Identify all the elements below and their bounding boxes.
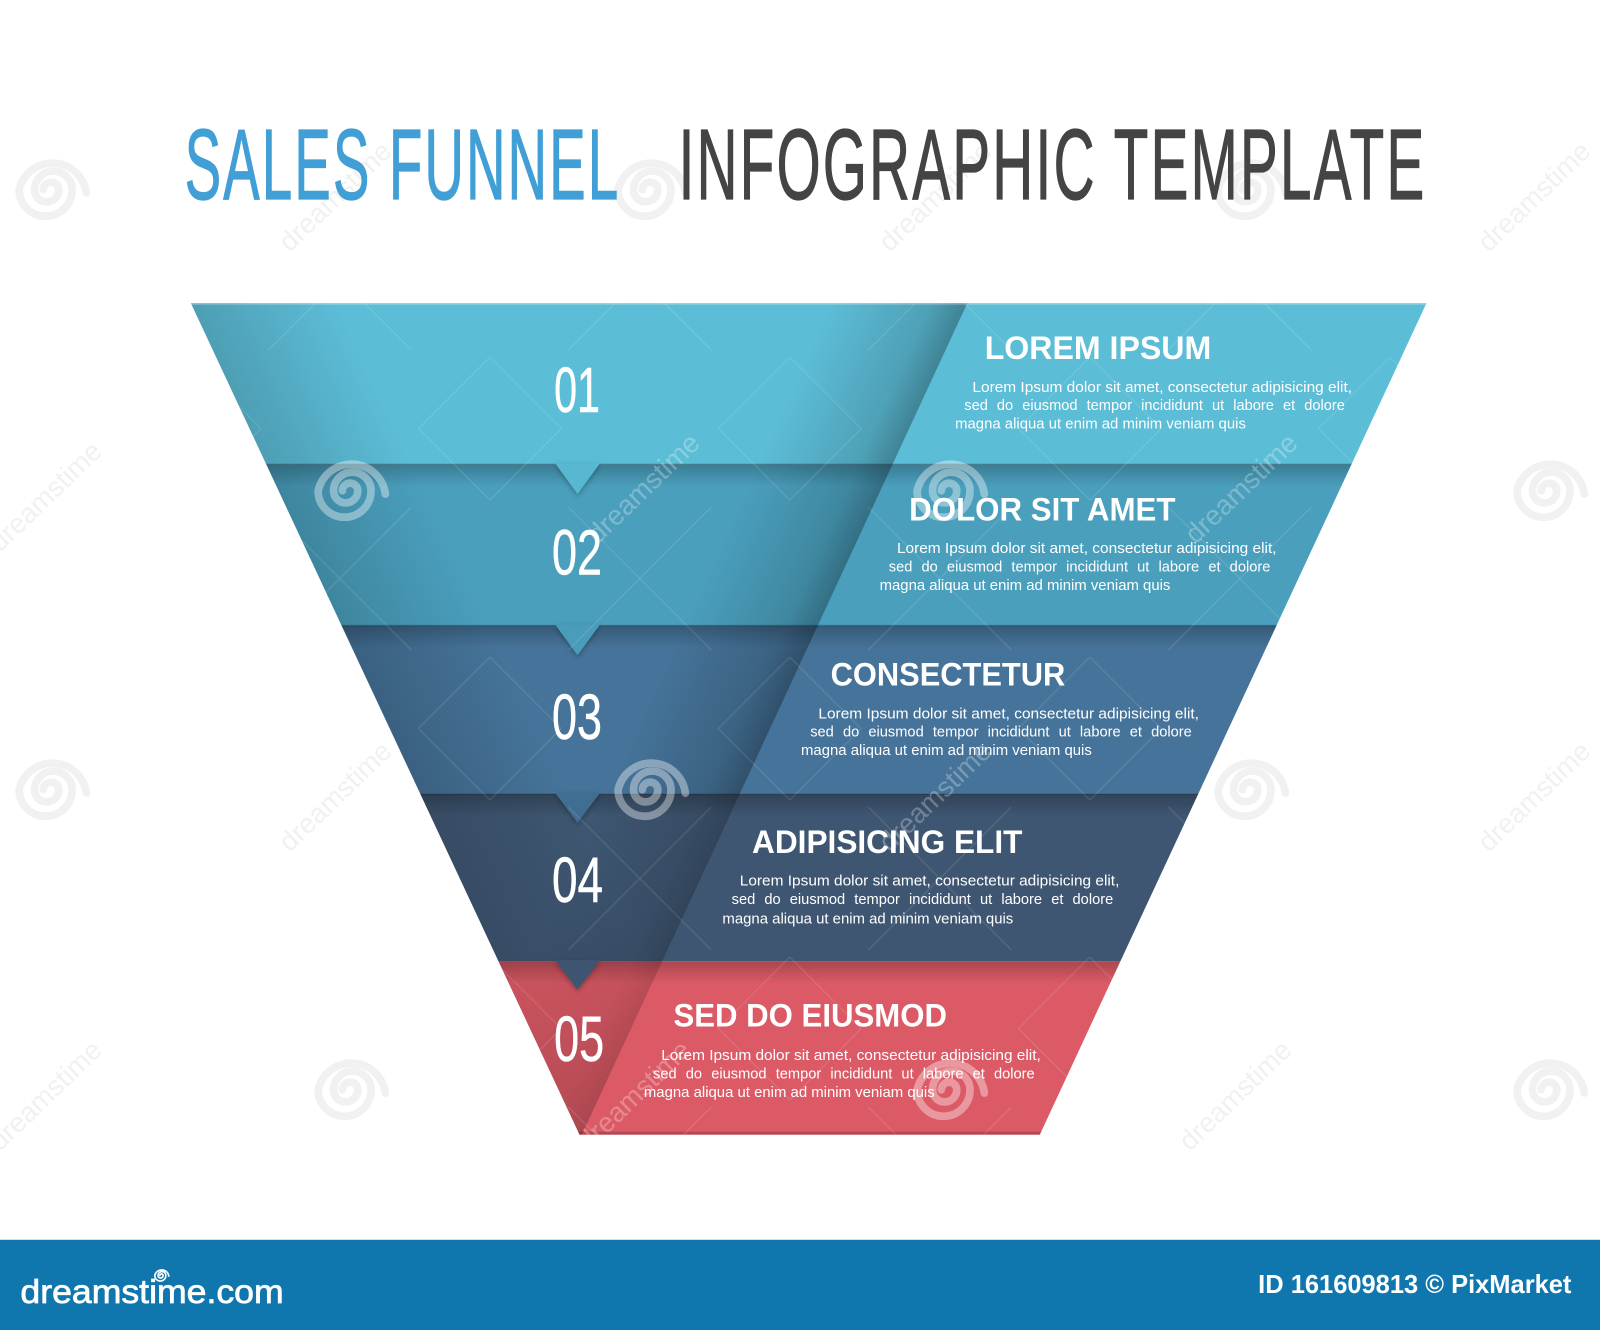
- text block: [722, 874, 1119, 927]
- text block: sed do eiusmod tempor incididunt ut labore et dolore: [810, 725, 1192, 741]
- footer bar: [0, 1240, 1600, 1330]
- step 05: [554, 997, 1041, 1101]
- band fills: [191, 303, 1427, 1135]
- background watermark: dreamstime: [1471, 135, 1596, 257]
- text block: sed do eiusmod tempor incididunt ut labore et dolore: [732, 892, 1113, 908]
- step 02: [552, 490, 1277, 594]
- text block: magna aliqua ut enim ad minim veniam quis: [955, 417, 1246, 433]
- funnel watermark: [239, 303, 1398, 1134]
- footer credit: ID 161609813 © PixMarket: [1258, 1271, 1572, 1299]
- heading: CONSECTETUR: [831, 656, 1065, 693]
- funnel watermark: dreamstime: [581, 427, 706, 549]
- number 03: 03: [552, 681, 602, 753]
- text block: sed do eiusmod tempor incididunt ut labore et dolore: [653, 1067, 1035, 1083]
- text block: sed do eiusmod tempor incididunt ut labore et dolore: [889, 559, 1270, 575]
- title: [185, 109, 1427, 221]
- number 05: 05: [554, 1003, 604, 1075]
- step 01: [554, 329, 1352, 433]
- number 04: 04: [552, 844, 603, 916]
- arrow: band 4: [555, 960, 600, 990]
- funnel watermark: dreamstime: [571, 1034, 696, 1156]
- text block: magna aliqua ut enim ad minim veniam quis: [880, 578, 1170, 594]
- text block: [644, 1048, 1041, 1101]
- text block: [880, 541, 1277, 594]
- step 03: [552, 656, 1199, 759]
- number 02: 02: [552, 516, 602, 588]
- text block: [801, 706, 1199, 759]
- background watermark: dreamstime: [1471, 735, 1596, 857]
- background watermark: [0, 135, 1596, 1156]
- arrow: band 2: [555, 624, 600, 655]
- heading: SED DO EIUSMOD: [673, 997, 947, 1034]
- text block: Lorem Ipsum dolor sit amet, consectetur adipisicing elit,: [972, 380, 1352, 396]
- heading: DOLOR SIT AMET: [909, 490, 1176, 527]
- background watermark: dreamstime: [1172, 1034, 1297, 1156]
- arrow: band 1: [555, 463, 600, 494]
- footer logo: dreamstime.com: [20, 1274, 284, 1311]
- number 01: 01: [554, 354, 600, 426]
- fold and edge shading: [184, 303, 980, 1135]
- background watermark: dreamstime: [272, 135, 397, 257]
- arrow: band 3: [555, 793, 600, 822]
- background watermark: dreamstime: [272, 735, 397, 857]
- step 04: [552, 823, 1119, 927]
- funnel: [184, 303, 1439, 1135]
- text block: Lorem Ipsum dolor sit amet, consectetur adipisicing elit,: [661, 1048, 1041, 1064]
- text block: sed do eiusmod tempor incididunt ut labore et dolore: [964, 398, 1345, 414]
- text block: magna aliqua ut enim ad minim veniam quis: [801, 743, 1092, 759]
- heading: ADIPISICING ELIT: [752, 823, 1023, 860]
- text block: Lorem Ipsum dolor sit amet, consectetur adipisicing elit,: [818, 706, 1199, 722]
- background watermark: dreamstime: [872, 135, 997, 257]
- text block: [955, 380, 1352, 433]
- title: sales funnel: SALES FUNNEL: [185, 109, 620, 221]
- funnel watermark: dreamstime: [1179, 427, 1304, 549]
- text block: magna aliqua ut enim ad minim veniam quis: [644, 1085, 935, 1101]
- heading: LOREM IPSUM: [985, 329, 1211, 366]
- funnel watermark: dreamstime: [872, 735, 997, 857]
- text block: Lorem Ipsum dolor sit amet, consectetur adipisicing elit,: [897, 541, 1277, 557]
- text block: Lorem Ipsum dolor sit amet, consectetur adipisicing elit,: [740, 874, 1119, 890]
- text block: magna aliqua ut enim ad minim veniam quis: [722, 911, 1013, 927]
- band top shadows: [184, 303, 1439, 1135]
